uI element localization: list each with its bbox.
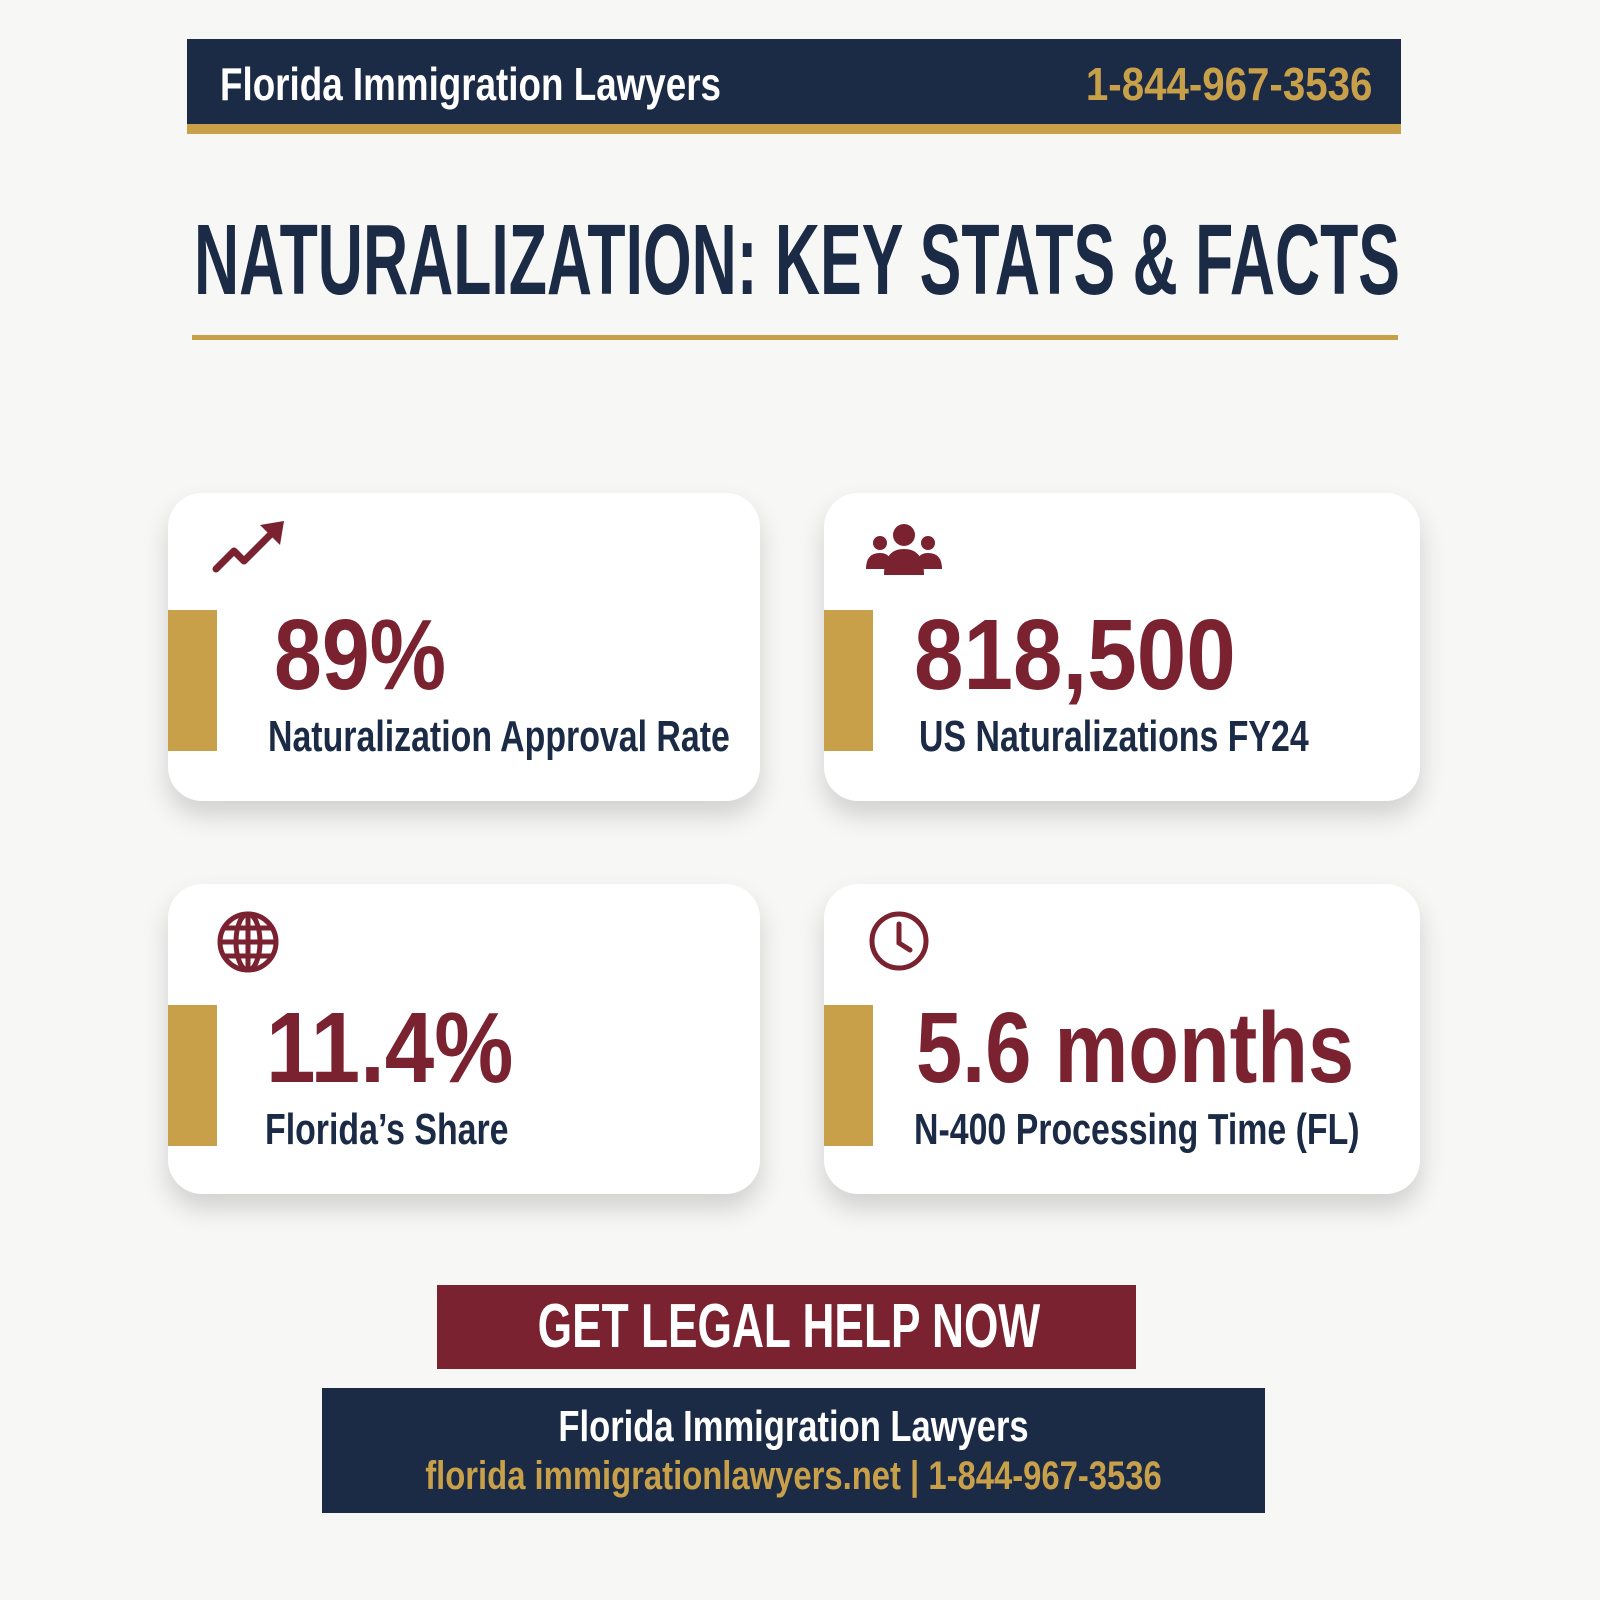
label: Naturalization Approval Rate bbox=[268, 712, 730, 761]
CTA button: GET LEGAL HELP NOW bbox=[538, 1292, 1040, 1361]
stat: 818,500: 818,500 bbox=[914, 599, 1236, 711]
CTA button bbox=[437, 1285, 1136, 1369]
icon: clock bbox=[870, 912, 928, 970]
icon: people bbox=[866, 524, 942, 575]
header phone: 1-844-967-3536 bbox=[1086, 58, 1372, 110]
icon: trend arrow bbox=[212, 521, 284, 572]
footer website and phone: florida immigrationlawyers.net | 1-844-967-3536 bbox=[425, 1454, 1162, 1498]
header bar bbox=[187, 39, 1401, 134]
stat: 5.6 months: 5.6 months bbox=[916, 992, 1354, 1104]
title: NATURALIZATION: KEY STATS & FACTS bbox=[194, 204, 1400, 316]
label: N-400 Processing Time (FL) bbox=[914, 1105, 1360, 1154]
panel: approval rate bbox=[168, 493, 760, 801]
panel: processing time bbox=[824, 884, 1420, 1194]
stat: 89%: 89% bbox=[274, 599, 446, 711]
icon: globe bbox=[218, 912, 278, 972]
label: Florida’s Share bbox=[265, 1105, 509, 1154]
panel: naturalizations bbox=[824, 493, 1420, 801]
panel: florida share bbox=[168, 884, 760, 1194]
footer contact box bbox=[322, 1388, 1265, 1513]
title underline bbox=[192, 335, 1398, 340]
footer firm name: Florida Immigration Lawyers bbox=[558, 1402, 1029, 1451]
header firm name: Florida Immigration Lawyers bbox=[220, 58, 721, 110]
stat: 11.4%: 11.4% bbox=[266, 992, 513, 1104]
label: US Naturalizations FY24 bbox=[919, 712, 1309, 761]
